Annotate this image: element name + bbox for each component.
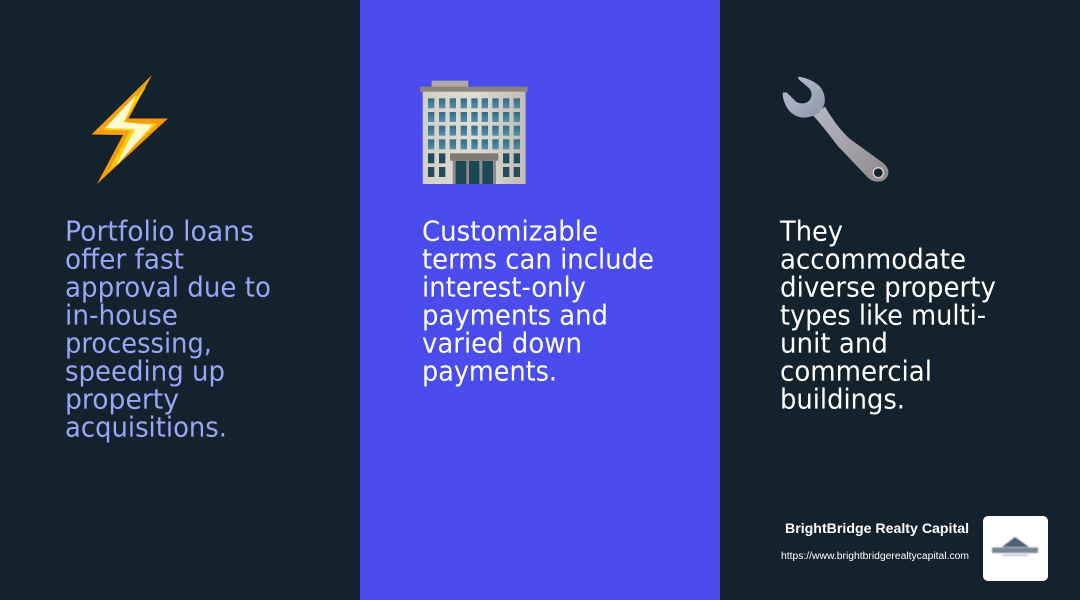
text block: fast approval: [65, 216, 271, 444]
text block: fast approval: offer fast: [65, 244, 184, 276]
text block: fast approval: approval due to: [65, 272, 271, 304]
text block: fast approval: processing,: [65, 328, 212, 360]
text block: diverse property types: types like multi-: [780, 300, 986, 332]
text block: customizable terms: payments.: [422, 356, 557, 388]
text block: diverse property types: buildings.: [780, 384, 905, 416]
company name: BrightBridge Realty Capital: [785, 520, 969, 536]
logo: [983, 516, 1048, 581]
panel: middle background: [360, 0, 720, 600]
text block: diverse property types: commercial: [780, 356, 932, 388]
panel: right background: [720, 0, 1080, 600]
text block: customizable terms: payments and: [422, 300, 608, 332]
text block: fast approval: speeding up: [65, 356, 225, 388]
text block: customizable terms: Customizable: [422, 216, 598, 248]
text block: diverse property types: They: [779, 216, 843, 248]
text block: fast approval: acquisitions.: [65, 412, 227, 444]
text block: diverse property types: [779, 216, 996, 416]
icon: lightning bolt: [92, 75, 168, 184]
text block: fast approval: Portfolio loans: [65, 216, 254, 248]
text block: customizable terms: varied down: [422, 328, 582, 360]
text block: customizable terms: interest-only: [422, 272, 586, 304]
text block: fast approval: property: [65, 384, 179, 416]
panel: left background: [0, 0, 360, 600]
website url: https://www.brightbridgerealtycapital.com: [781, 551, 969, 562]
text block: customizable terms: terms can include: [422, 244, 654, 276]
icon: wrench: [783, 77, 888, 182]
text block: diverse property types: unit and: [780, 328, 888, 360]
icon: office building: [420, 81, 528, 184]
text block: diverse property types: accommodate: [780, 244, 966, 276]
text block: customizable terms: [422, 216, 654, 388]
text block: fast approval: in-house: [65, 300, 178, 332]
text block: diverse property types: diverse property: [780, 272, 996, 304]
